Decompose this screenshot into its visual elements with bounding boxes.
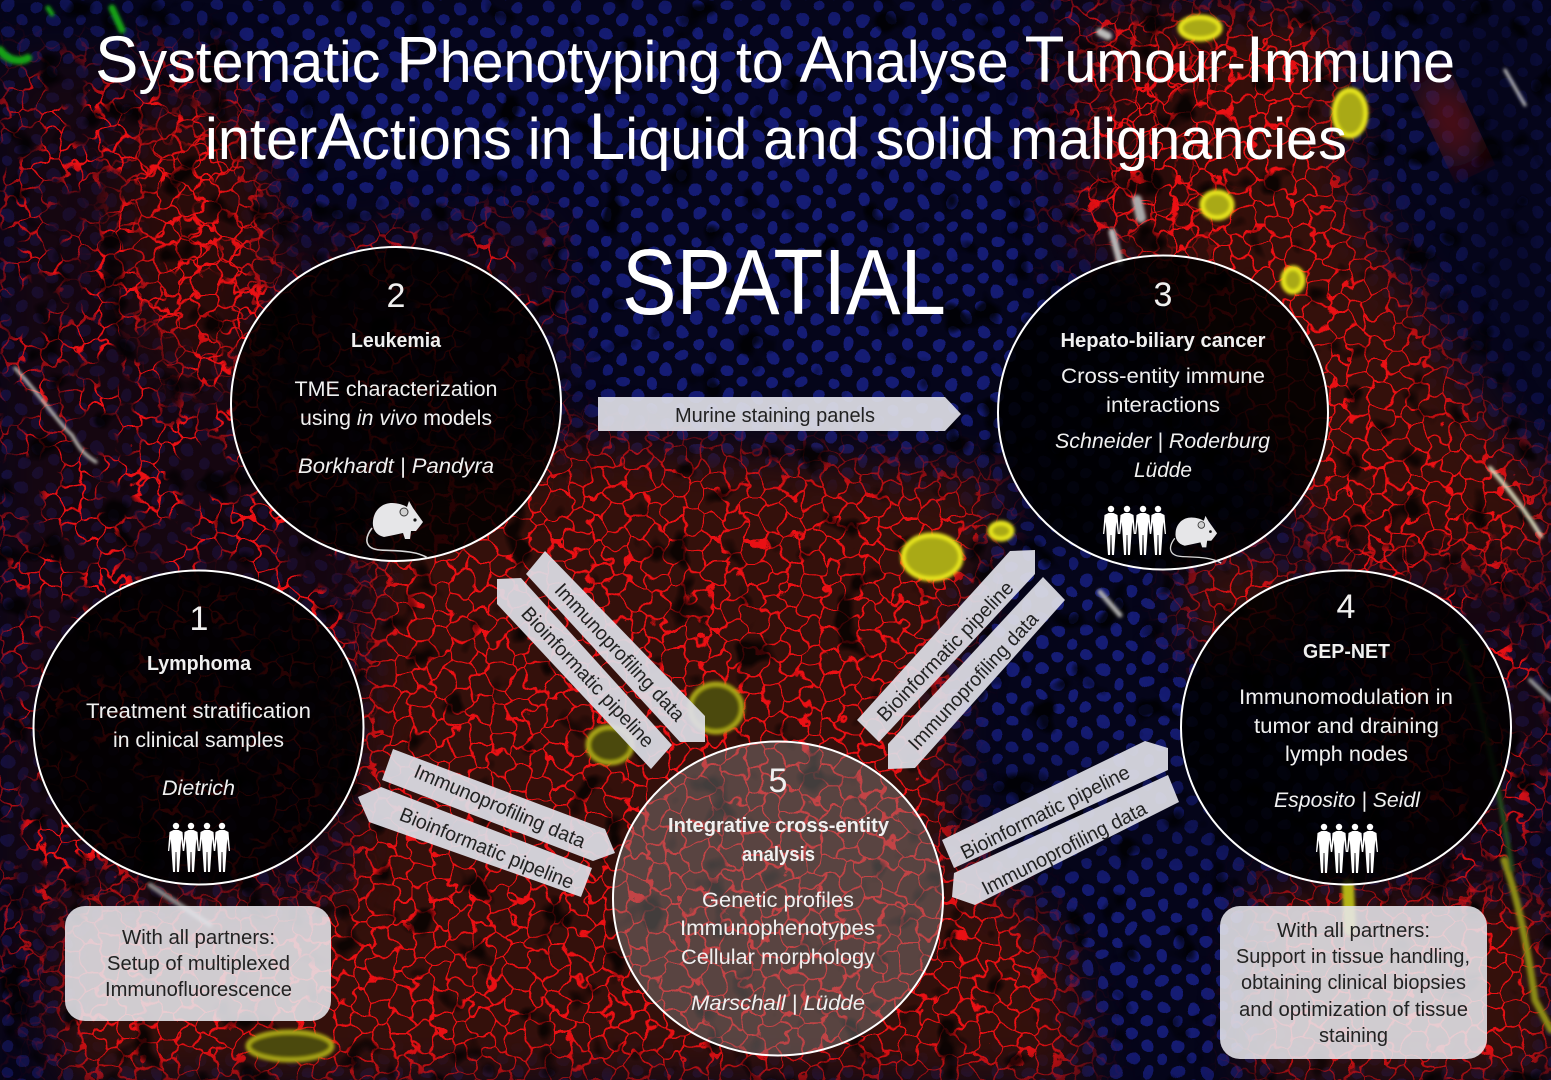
panel: circle 5 integrative analysis: Cellular morphology [681,946,876,969]
arrow: bioinformatic pipeline to circle 4 [942,741,1168,868]
arrow: bioinformatic pipeline to circle 3 [857,550,1035,742]
panel: circle 4 GEP-NET [1181,570,1511,884]
panel: circle 1 lymphoma: Dietrich [162,777,235,800]
panel: circle 4 GEP-NET: Esposito | Seidl [1274,789,1421,812]
arrow: immunoprofiling data from circle 4 [952,775,1179,905]
title [95,22,1455,173]
callout: partners tissue handling: Support in tissue handling, [1236,946,1470,968]
arrow: immunoprofiling data to circle 5 from circle 2 [526,551,705,742]
panel: circle 5 integrative analysis: Immunophenotypes [680,917,875,940]
callout: partners tissue handling: With all partners: [1277,920,1430,942]
panel: circle 2 leukemia: using in vivo models [300,407,492,430]
arrow: bioinformatic pipeline to circle 1 [358,787,592,897]
callout: partners multiplexed immunofluorescence: With all partners: [122,927,275,949]
heading: SPATIAL: SPATIAL [622,230,946,334]
arrow: bioinformatic pipeline to circle 3: Bioinformatic pipeline [873,577,1018,726]
panel: circle 2 leukemia: TME characterization [294,378,498,401]
callout: partners tissue handling: obtaining clinical biopsies [1241,972,1466,994]
panel: circle 3 hepato-biliary cancer: Hepato-biliary cancer [1060,330,1266,352]
arrow: bioinformatic pipeline to circle 2 [497,578,672,769]
panel: circle 1 lymphoma [34,570,364,884]
arrow: bioinformatic pipeline to circle 4: Bioinformatic pipeline [957,762,1134,864]
title: interActions in Liquid and solid malignancies [205,99,1347,173]
callout: partners tissue handling [1220,906,1487,1059]
panel: circle 2 leukemia: 2 [387,277,405,315]
panel: circle 1 lymphoma: Lymphoma [147,653,252,675]
panel: circle 4 GEP-NET: GEP-NET [1303,641,1390,663]
arrow: bioinformatic pipeline to circle 1: Bioinformatic pipeline [396,804,577,894]
icon: patients and mouse [1103,506,1221,563]
panel: circle 3 hepato-biliary cancer [998,256,1328,570]
panel: circle 2 leukemia: Leukemia [351,330,442,352]
arrow: immunoprofiling data from circle 3: Immunoprofiling data [904,608,1044,755]
panel: circle 5 integrative analysis: analysis [742,844,815,866]
panel: circle 5 integrative analysis: 5 [769,762,787,800]
arrow: bioinformatic pipeline to circle 2: Bioinformatic pipeline [516,603,658,752]
callout: partners multiplexed immunofluorescence: Immunofluorescence [105,979,292,1001]
panel: circle 3 hepato-biliary cancer: Schneider | Roderburg [1055,430,1270,453]
panel: circle 3 hepato-biliary cancer: interactions [1106,394,1220,417]
panel: circle 5 integrative analysis: Marschall | Lüdde [691,992,865,1015]
arrow: murine staining panels [598,397,961,431]
panel: circle 5 integrative analysis [613,742,943,1056]
callout: partners tissue handling: staining [1319,1025,1388,1047]
icon: patients [168,823,230,872]
arrow: immunoprofiling data from circle 1 [382,749,615,861]
icon: patients [1316,824,1378,873]
panel: circle 4 GEP-NET: Immunomodulation in [1239,686,1453,709]
title: Systematic Phenotyping to Analyse Tumour-Immune [95,22,1455,96]
arrow: immunoprofiling data to circle 5 from circle 2: Immunoprofiling data [550,579,689,727]
panel: circle 4 GEP-NET: 4 [1337,588,1355,626]
panel: circle 4 GEP-NET: lymph nodes [1285,743,1408,766]
panel: circle 2 leukemia: Borkhardt | Pandyra [298,455,494,478]
callout: partners multiplexed immunofluorescence [65,906,331,1021]
panel: circle 1 lymphoma: 1 [190,600,208,638]
panel: circle 3 hepato-biliary cancer: 3 [1154,276,1172,314]
panel: circle 5 integrative analysis: Genetic profiles [702,889,854,912]
panel: circle 1 lymphoma: in clinical samples [113,729,284,752]
arrow: immunoprofiling data from circle 4: Immunoprofiling data [978,797,1151,900]
callout: partners tissue handling: and optimization of tissue [1239,999,1468,1021]
panel: circle 4 GEP-NET: tumor and draining [1254,715,1439,738]
arrow: murine staining panels: Murine staining panels [675,405,875,427]
panel: circle 2 leukemia [231,247,561,561]
callout: partners multiplexed immunofluorescence: Setup of multiplexed [107,953,290,975]
icon: mouse [367,501,428,558]
panel: circle 3 hepato-biliary cancer: Lüdde [1134,459,1192,482]
arrow: immunoprofiling data from circle 1: Immunoprofiling data [411,761,589,853]
arrow: immunoprofiling data from circle 3 [888,577,1065,769]
panel: circle 3 hepato-biliary cancer: Cross-entity immune [1061,365,1265,388]
panel: circle 1 lymphoma: Treatment stratification [86,700,311,723]
panel: circle 5 integrative analysis: Integrative cross-entity [668,815,890,837]
